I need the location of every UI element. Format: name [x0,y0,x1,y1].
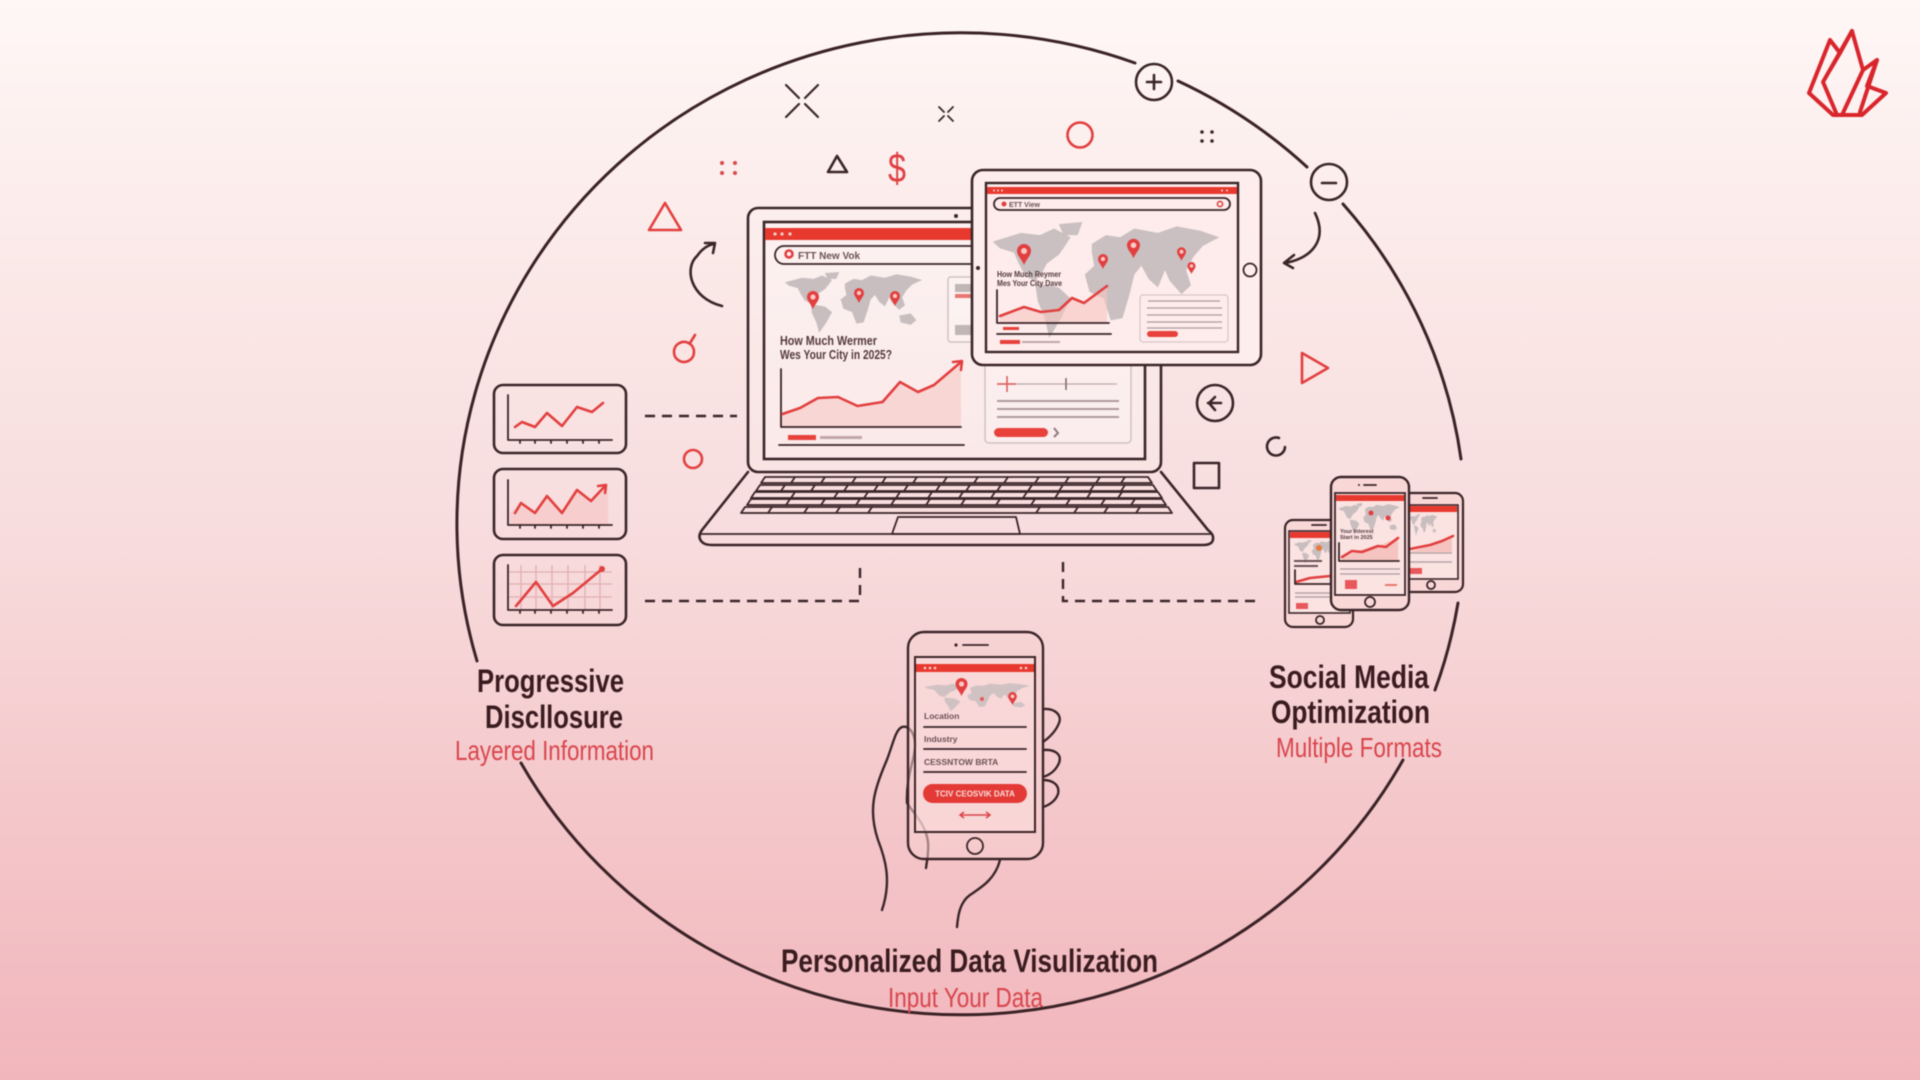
panel: chart card 1 [494,385,626,453]
hand [873,709,1060,927]
laptop lid [748,208,1161,472]
large circle outline [457,33,1461,1015]
tablet search bar [994,198,1230,210]
panel: laptop: FTT New Vok [798,251,860,262]
heading: Personalized Data Visualization: Input Your Data [888,982,1043,1013]
tablet world map [993,222,1219,338]
heading: Progressive Disclosure: Layered Information [455,735,654,766]
form fields: Location [924,711,959,721]
heading: Progressive Disclosure: Progressive [477,663,624,699]
trackpad [892,517,1020,534]
icon: black dots [1200,130,1214,143]
laptop line chart [782,364,961,427]
panel: tablet: ETT View [1009,202,1041,209]
panel: laptop: Wes Your City in 2025? [780,348,892,362]
phone map [924,682,1030,711]
left phone [1285,520,1353,627]
panel: tablet [972,170,1261,365]
icon: red triangle [649,203,681,230]
call to action button [923,784,1027,803]
laptop base [700,472,1213,545]
laptop world map [785,272,922,333]
icon: red play triangle [1302,353,1328,383]
heading: Social Media Optimization: Multiple Formats [1276,732,1442,763]
panel: tablet: Mes Your City Dave [997,279,1062,288]
tablet heading: How Much Reymer [997,270,1061,279]
right phone [1395,493,1463,592]
icon: small triangle [828,156,847,172]
keyboard [741,477,1172,513]
center phone [1331,477,1409,610]
panel: hand holding phone: TCIV CEOSVIK DATA [935,790,1015,798]
laptop search bar [775,246,1005,264]
icon: curved arrow left [691,243,722,306]
icon: open circle [1267,437,1285,455]
icon: X mark large [786,85,818,117]
icon: X mark small [939,107,953,121]
panel: hand holding phone: CESSNTOW BRTA [924,757,998,767]
icon: curved arrow right [1284,213,1320,268]
icon: red circle with stem [674,335,695,362]
heading: Social Media Optimization: Optimization [1271,694,1430,730]
panel: hand holding phone: Industry [924,734,958,744]
laptop heading: How Much Wermer [780,334,877,348]
heading: Progressive Disclosure [455,663,654,766]
dashed connector lines [645,416,1262,601]
heading: Social Media Optimization: Social Media [1269,659,1429,695]
heading: Progressive Disclosure: Discllosure [485,699,623,735]
tablet legend [1003,327,1019,330]
icon: red dots [720,161,737,175]
panel: chart card 2 [494,469,626,539]
icon: red circle small [684,450,702,468]
icon: square [1194,463,1219,488]
heading: Social Media Optimization [1269,659,1442,763]
swipe arrow [960,812,990,818]
tablet line chart [1000,286,1107,323]
icon: dollar sign: $ [888,145,906,191]
laptop side cards [948,277,988,342]
logo [1809,31,1886,115]
laptop legend [788,435,816,440]
home button [967,838,983,854]
heading: Personalized Data Visualization: Personalized Data Visulization [781,943,1158,979]
panel: laptop [700,208,1213,545]
phone body [908,632,1043,859]
icon: plus button [1136,64,1172,100]
panel: hand holding phone [873,632,1060,927]
center phone: Start in 2025 [1340,535,1373,541]
icon: red circle top [1068,122,1092,148]
speaker [963,644,988,646]
icon: minus button [1311,164,1347,200]
center phone: Your Interest [1340,529,1374,535]
panel: social media phones [1285,477,1463,627]
heading: Personalized Data Visualization [781,943,1158,1013]
tablet info card [1140,295,1228,342]
icon: back arrow button [1197,385,1233,421]
panel: chart card 3 [494,555,626,625]
